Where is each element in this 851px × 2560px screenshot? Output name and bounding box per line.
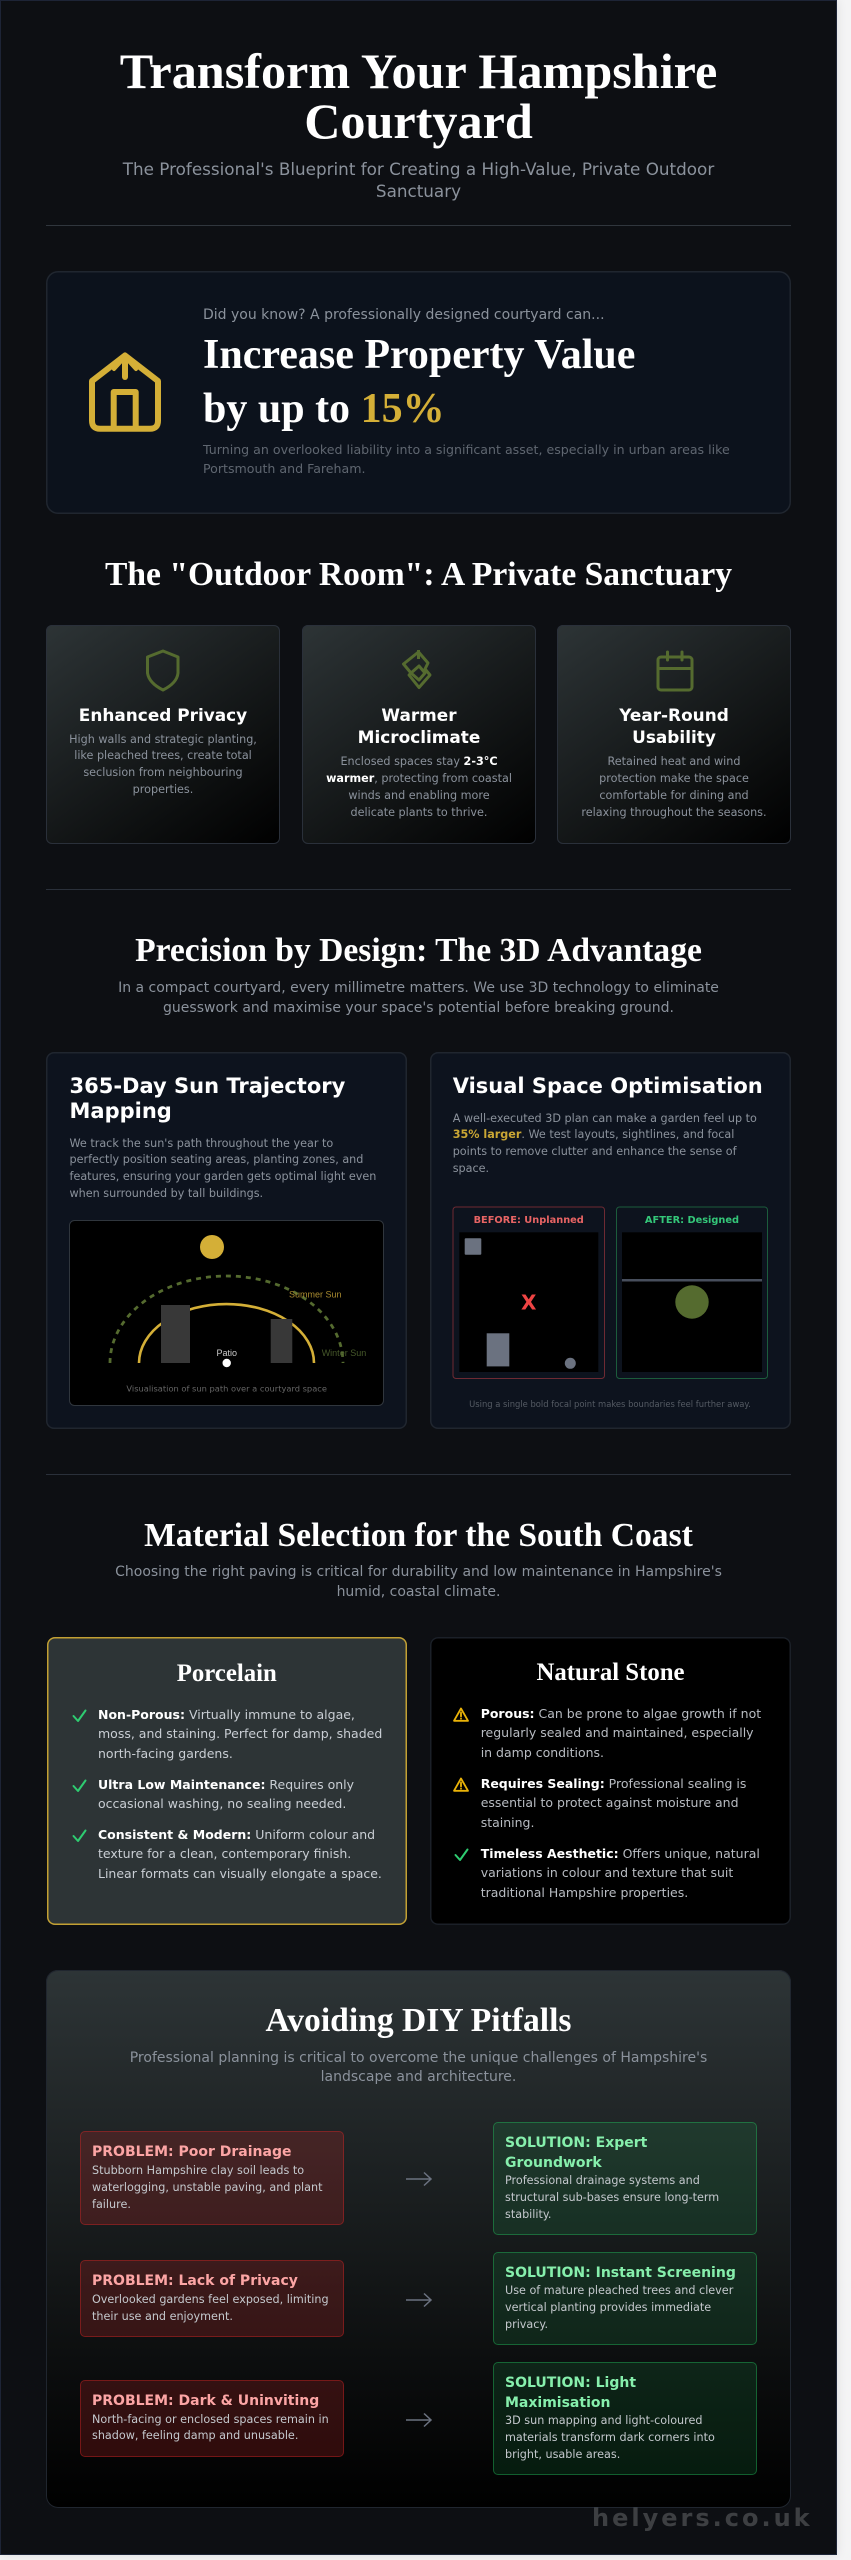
panel: porcelain	[46, 1637, 407, 1925]
text: value explanation: Turning an overlooked liability into a significant asset, especially in urban areas like	[203, 442, 730, 457]
list item: consistent and modern: texture for a clean, contemporary finish.	[98, 1846, 351, 1861]
text: precision intro: In a compact courtyard, every millimetre matters. We use 3D technology to eliminate	[118, 980, 719, 996]
text: delicate plants to thrive.	[350, 806, 488, 819]
heading: outdoor room: The "Outdoor Room": A Private Sanctuary	[105, 556, 732, 593]
icon: calendar	[656, 650, 694, 692]
icon: check	[454, 1848, 468, 1861]
list item: requires sealing: essential to protect against moisture and	[481, 1795, 739, 1810]
text: features, ensuring your garden gets optimal light even	[70, 1170, 376, 1183]
list item: non-porous: north-facing gardens.	[98, 1746, 233, 1761]
icon: check	[72, 1830, 86, 1842]
text: value explanation	[203, 442, 730, 476]
list item: requires sealing	[481, 1776, 746, 1830]
diagram: before unplanned: BEFORE: Unplanned	[474, 1215, 584, 1226]
text: material intro: Choosing the right paving is critical for durability and low maintenance in Hampshire's	[115, 1564, 722, 1580]
solution: expert groundwork: Groundwork	[505, 2155, 602, 2171]
solution: instant screening: SOLUTION: Instant Screening	[505, 2265, 736, 2281]
heading: Enhanced Privacy	[79, 705, 247, 725]
solution: expert groundwork: SOLUTION: Expert	[505, 2135, 647, 2151]
diagram: before unplanned: X	[521, 1290, 537, 1314]
caption: Using a single bold focal point makes boundaries feel further away.	[469, 1399, 751, 1409]
diagram: after designed: AFTER: Designed	[645, 1215, 739, 1226]
icon: house	[89, 352, 161, 432]
heading: increase property value: by up to 15%	[203, 386, 445, 432]
list item: non-porous: Non-Porous: Virtually immune to algae,	[98, 1707, 355, 1722]
text: properties.	[133, 783, 193, 796]
icon: diamonds	[402, 650, 432, 690]
text	[581, 755, 767, 819]
text: warmer, protecting from coastal	[326, 772, 512, 785]
solution: light maximisation: materials transform dark corners into	[505, 2431, 715, 2444]
solution: light maximisation: SOLUTION: Light	[505, 2375, 636, 2391]
diagram: after designed	[616, 1206, 768, 1379]
title	[120, 43, 717, 149]
chart: sun path diagram: Patio	[216, 1348, 237, 1358]
solution: light maximisation: 3D sun mapping and light-coloured	[505, 2414, 702, 2427]
solution: expert groundwork	[493, 2122, 757, 2235]
text: Professional planning is critical to overcome the unique challenges of Hampshire's	[130, 2050, 707, 2066]
problem: poor drainage	[80, 2131, 344, 2225]
problem: dark and uninviting	[80, 2380, 344, 2457]
list item: timeless aesthetic: variations in colour and texture that suit	[481, 1865, 733, 1880]
text: precision intro	[118, 980, 719, 1016]
icon: warning	[453, 1708, 469, 1722]
subtitle: Sanctuary	[376, 181, 461, 201]
problem: lack of privacy	[80, 2260, 344, 2337]
text	[326, 755, 512, 819]
icon: check	[72, 1780, 86, 1792]
heading: Avoiding DIY Pitfalls	[266, 2002, 571, 2039]
heading: Usability	[632, 727, 716, 747]
text: seclusion from neighbouring	[83, 766, 243, 779]
text	[70, 1137, 376, 1200]
heading: precision by design: Precision by Design: The 3D Advantage	[135, 932, 702, 969]
text: precision intro: guesswork and maximise your space's potential before breaking ground.	[163, 1000, 674, 1016]
panel: avoiding DIY pitfalls	[46, 1970, 791, 2508]
list item: porous	[481, 1706, 761, 1760]
solution: instant screening: privacy.	[505, 2318, 548, 2331]
text	[130, 2050, 707, 2085]
list item: low maintenance: Ultra Low Maintenance: Requires only	[98, 1777, 354, 1792]
icon: shield	[146, 650, 180, 692]
list item: consistent and modern	[98, 1827, 382, 1881]
heading: Mapping	[70, 1099, 172, 1123]
subtitle	[122, 159, 714, 201]
chart: sun path diagram: Visualisation of sun path over a courtyard space	[126, 1384, 327, 1394]
list item: consistent and modern: Consistent & Modern: Uniform colour and	[98, 1827, 375, 1842]
list item: timeless aesthetic: traditional Hampshire properties.	[481, 1885, 688, 1900]
solution: light maximisation: bright, usable areas.	[505, 2448, 620, 2461]
text: perfectly position seating areas, planting zones, and	[70, 1153, 363, 1166]
list item: non-porous	[98, 1707, 382, 1761]
text: Enclosed spaces stay 2-3°C	[340, 755, 498, 768]
text: winds and enabling more	[348, 789, 490, 802]
watermark: helyers.co.uk	[592, 2504, 813, 2532]
panel: enhanced privacy	[46, 625, 280, 844]
solution: expert groundwork: Professional drainage systems and	[505, 2174, 700, 2187]
title: Courtyard	[304, 93, 533, 149]
text: material intro: humid, coastal climate.	[337, 1584, 500, 1600]
panel: warmer microclimate	[302, 625, 536, 844]
solution: instant screening	[493, 2252, 757, 2345]
text: did you know: Did you know? A professionally designed courtyard can...	[203, 307, 605, 323]
solution: instant screening: vertical planting provides immediate	[505, 2301, 711, 2314]
heading: Porcelain	[177, 1660, 277, 1687]
list item: requires sealing: Requires Sealing: Professional sealing is	[481, 1776, 746, 1791]
list item: timeless aesthetic: Timeless Aesthetic: Offers unique, natural	[481, 1846, 760, 1861]
text: when surrounded by tall buildings.	[70, 1187, 263, 1200]
list item: requires sealing: staining.	[481, 1815, 534, 1830]
heading	[358, 705, 480, 747]
list item: consistent and modern: Linear formats can visually elongate a space.	[98, 1866, 382, 1881]
chart: sun path diagram: Winter Sun	[322, 1348, 366, 1358]
heading: 365-Day Sun Trajectory	[70, 1074, 345, 1098]
heading: Warmer	[381, 705, 457, 725]
diagram: before unplanned	[452, 1206, 605, 1379]
list item: low maintenance	[98, 1777, 354, 1811]
chart: sun path diagram	[69, 1220, 384, 1406]
problem: lack of privacy: Overlooked gardens feel exposed, limiting	[92, 2293, 329, 2306]
solution: expert groundwork: stability.	[505, 2208, 551, 2221]
problem: dark and uninviting: North-facing or enclosed spaces remain in	[92, 2413, 329, 2426]
text: protection make the space	[599, 772, 749, 785]
chart: sun path diagram: Summer Sun	[289, 1290, 342, 1300]
heading	[619, 705, 729, 747]
problem: poor drainage: Stubborn Hampshire clay soil leads to	[92, 2164, 304, 2177]
arrow	[406, 2293, 432, 2307]
text	[452, 1112, 757, 1175]
text: comfortable for dining and	[599, 789, 749, 802]
solution: light maximisation: Maximisation	[505, 2395, 610, 2411]
problem: poor drainage: failure.	[92, 2198, 131, 2210]
text: landscape and architecture.	[321, 2069, 516, 2085]
text: A well-executed 3D plan can make a garden feel up to	[453, 1112, 757, 1125]
panel: year-round usability	[557, 625, 791, 844]
list item: porous: Porous: Can be prone to algae growth if not	[481, 1706, 761, 1721]
heading: Visual Space Optimisation	[453, 1074, 763, 1098]
list item: non-porous: moss, and staining. Perfect for damp, shaded	[98, 1726, 382, 1741]
solution: expert groundwork: structural sub-bases ensure long-term	[505, 2191, 719, 2204]
panel: sun trajectory	[46, 1052, 407, 1429]
problem: dark and uninviting: PROBLEM: Dark & Uninviting	[92, 2393, 319, 2409]
arrow	[406, 2172, 432, 2186]
text: value explanation: Portsmouth and Fareham.	[203, 461, 366, 476]
text: space.	[453, 1162, 489, 1175]
list item: timeless aesthetic	[480, 1846, 760, 1900]
heading: increase property value	[203, 332, 635, 432]
text: Retained heat and wind	[608, 755, 740, 768]
problem: dark and uninviting: shadow, feeling damp and unusable.	[92, 2429, 298, 2442]
panel: visual space optimisation	[430, 1052, 791, 1429]
panel: property value callout	[46, 271, 791, 514]
text: material intro	[115, 1564, 722, 1600]
problem: poor drainage: waterlogging, unstable paving, and plant	[92, 2181, 322, 2194]
heading: increase property value: Increase Property Value	[203, 332, 635, 378]
solution: instant screening: Use of mature pleached trees and clever	[505, 2284, 733, 2297]
text: points to remove clutter and enhance the sense of	[453, 1145, 737, 1158]
heading: Year-Round	[619, 705, 729, 725]
icon: check	[72, 1710, 86, 1722]
heading: Microclimate	[358, 727, 480, 747]
title: Transform Your Hampshire	[120, 43, 717, 99]
problem: poor drainage: PROBLEM: Poor Drainage	[92, 2144, 291, 2160]
list item: porous: in damp conditions.	[481, 1745, 604, 1760]
heading: Natural Stone	[536, 1659, 685, 1686]
problem: lack of privacy: their use and enjoyment.	[92, 2310, 233, 2323]
text: High walls and strategic planting,	[69, 733, 257, 746]
solution: light maximisation	[493, 2362, 757, 2475]
subtitle: The Professional's Blueprint for Creating a High-Value, Private Outdoor	[123, 159, 714, 179]
header: title and subtitle	[120, 43, 717, 201]
heading: material selection: Material Selection for the South Coast	[144, 1517, 693, 1554]
list item: porous: regularly sealed and maintained, especially	[481, 1725, 754, 1740]
panel: natural stone	[430, 1637, 791, 1925]
heading	[70, 1074, 345, 1123]
text: 35% larger. We test layouts, sightlines, and focal	[453, 1128, 734, 1141]
arrow	[406, 2413, 432, 2427]
icon: warning	[453, 1778, 469, 1792]
problem: lack of privacy: PROBLEM: Lack of Privacy	[92, 2273, 298, 2289]
text	[69, 733, 257, 796]
text: We track the sun's path throughout the year to	[70, 1137, 333, 1150]
list item: low maintenance: occasional washing, no sealing needed.	[98, 1796, 346, 1811]
text: like pleached trees, create total	[74, 749, 252, 762]
text: relaxing throughout the seasons.	[581, 806, 767, 819]
